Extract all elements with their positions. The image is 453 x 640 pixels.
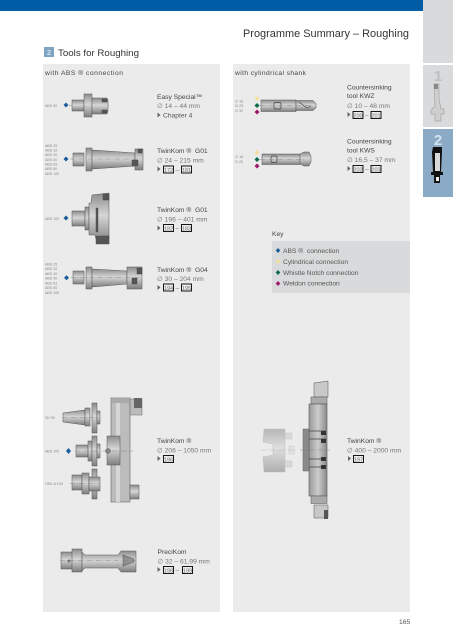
tool: TwinKom G01 small xyxy=(45,144,143,176)
text: TwinKom 206-1050: TwinKom ® xyxy=(157,437,191,445)
tool: TwinKom G04: ABS 63 xyxy=(45,282,57,286)
key item: ABS: ABS ® connection xyxy=(283,247,340,255)
text: TwinKom G01 196-401: TwinKom ® G01 xyxy=(157,206,208,214)
adapter: HSK-A 100 xyxy=(70,469,100,499)
tool: TwinKom G01 small: ABS 32 xyxy=(45,148,57,152)
side tab: chapter 2 xyxy=(423,129,453,197)
text: Easy Special: Chapter 4 xyxy=(163,112,193,120)
tool: Easy Special: ABS 50 xyxy=(45,104,57,108)
tool: TwinKom G01 large xyxy=(45,193,109,244)
text: Countersinking tool KWZ: – xyxy=(365,112,369,119)
key item: Whistle Notch: Whistle Notch connection xyxy=(283,270,359,277)
panel heading: with ABS connection: with ABS ® connection xyxy=(44,69,123,77)
adapter: SK 50 xyxy=(62,403,100,433)
tool: Countersinking KWZ xyxy=(235,96,316,114)
text: PreciKom: 199 xyxy=(183,568,192,574)
text: Countersinking tool KWS: – xyxy=(365,166,369,173)
side tab: chapter 1 xyxy=(423,65,453,127)
tool: TwinKom bar with SK, ABS and HSK adapters: SK 50 xyxy=(45,416,55,420)
panel: cylindrical shank xyxy=(233,64,410,612)
text: PreciKom: 198 xyxy=(164,568,173,574)
text: TwinKom 206-1050 xyxy=(157,437,212,463)
text: PreciKom: – xyxy=(176,567,180,574)
text: Countersinking tool KWZ: ∅ 10 – 48 mm xyxy=(347,103,390,110)
tool: TwinKom G04: ABS 100 xyxy=(45,291,59,295)
side tab: chapter 1: 1 xyxy=(434,68,442,85)
text: TwinKom G01 24-215: TwinKom ® G01 xyxy=(157,147,208,155)
text: TwinKom G04: 195 xyxy=(182,286,191,292)
bar body xyxy=(103,398,142,502)
text: TwinKom G01 196-401: ∅ 196 – 401 mm xyxy=(157,216,208,224)
side tab: blank xyxy=(423,0,453,63)
panel heading: with cylindrical shank: with cylindrical shank xyxy=(234,70,307,77)
tool: TwinKom G01 small: ABS 100 xyxy=(45,172,59,176)
text: TwinKom 400-2000: TwinKom ® xyxy=(347,437,381,445)
tool: TwinKom large bar with adapter xyxy=(261,381,330,519)
tool: TwinKom G04: ABS 40 xyxy=(45,272,57,276)
text: TwinKom G04: ∅ 30 – 204 mm xyxy=(157,276,204,283)
top blue bar xyxy=(0,0,423,11)
text: TwinKom G01 196-401 xyxy=(157,206,208,232)
tool: TwinKom G04: ABS 80 xyxy=(45,286,57,290)
panel: ABS connection xyxy=(43,64,220,612)
text: Countersinking tool KWS xyxy=(347,138,396,173)
text: PreciKom: ∅ 32 – 61,99 mm xyxy=(158,558,210,566)
tool: TwinKom G04: ABS 25 xyxy=(45,262,57,266)
tool: TwinKom G04: ABS 50 xyxy=(45,276,57,280)
text: Countersinking tool KWS: 203 xyxy=(371,167,381,173)
text: Countersinking tool KWZ: tool KWZ xyxy=(347,93,374,100)
text: Countersinking tool KWZ: Countersinking xyxy=(347,84,392,92)
tool: Countersinking KWS: ∅ 20 xyxy=(235,160,243,164)
tool: TwinKom G01 small: ABS 80 xyxy=(45,167,57,171)
tool: Countersinking KWZ: ∅ 25 xyxy=(235,104,243,108)
heading: section number: 2 xyxy=(47,48,51,57)
faded adapter xyxy=(261,429,297,472)
text: TwinKom G01 24-215 xyxy=(157,147,208,174)
text: Easy Special: ∅ 14 – 44 mm xyxy=(157,103,200,110)
text: Countersinking tool KWS: Countersinking xyxy=(347,138,392,146)
tool: Countersinking KWS xyxy=(235,150,311,168)
adapter: ABS 100 xyxy=(75,436,100,466)
tool: TwinKom G01 small: ABS 50 xyxy=(45,158,57,162)
text: TwinKom G01 24-215: – xyxy=(176,167,180,174)
text: TwinKom 206-1050: ∅ 206 – 1050 mm xyxy=(157,448,212,454)
tool: TwinKom G01 small: ABS 25 xyxy=(45,144,57,148)
text: TwinKom 206-1050: 196 xyxy=(164,457,173,463)
tool: Countersinking KWS: ∅ 16 xyxy=(235,155,243,159)
text: TwinKom G04 xyxy=(157,266,208,292)
key item: Cylindrical: Cylindrical connection xyxy=(283,259,348,266)
tool: TwinKom G01 small: ABS 40 xyxy=(45,153,57,157)
tool: TwinKom G01 large: ABS 100 xyxy=(45,217,59,221)
text: TwinKom 400-2000 xyxy=(347,437,402,463)
text: TwinKom G01 24-215: ∅ 24 – 215 mm xyxy=(157,158,204,164)
text: Countersinking tool KWZ: 200 xyxy=(353,113,363,119)
key panel xyxy=(272,241,410,293)
text: TwinKom 400-2000: ∅ 400 – 2000 mm xyxy=(347,448,402,454)
tool: TwinKom G04 xyxy=(45,262,142,295)
side tab: chapter 2: 2 xyxy=(434,132,442,149)
text: TwinKom G01 196-401: 182 xyxy=(164,226,173,232)
bar xyxy=(300,381,330,519)
tool: TwinKom bar with SK, ABS and HSK adapters xyxy=(45,398,142,502)
text: Countersinking tool KWS: ∅ 16,5 – 37 mm xyxy=(347,157,396,164)
text: Countersinking tool KWS: 202 xyxy=(353,167,363,173)
title: Programme Summary – Roughing xyxy=(243,28,409,40)
text: Countersinking tool KWZ: 201 xyxy=(371,113,381,119)
tool: PreciKom xyxy=(60,549,136,572)
tool: Countersinking KWZ: ∅ 32 xyxy=(235,109,243,113)
tool: Countersinking KWZ: ∅ 16 xyxy=(235,100,243,104)
text: PreciKom xyxy=(158,549,210,574)
text: TwinKom G01 196-401: – xyxy=(176,225,180,232)
text: Countersinking tool KWZ xyxy=(347,84,392,119)
text: TwinKom G01 24-215: 172 xyxy=(164,168,173,174)
tool: TwinKom G01 small: ABS 63 xyxy=(45,162,57,166)
heading: Tools for Roughing: Tools for Roughing xyxy=(58,48,139,58)
text: PreciKom: PreciKom xyxy=(158,549,187,556)
heading: section number xyxy=(44,47,54,57)
text: TwinKom G04: – xyxy=(176,285,180,292)
text: TwinKom 400-2000: 197 xyxy=(354,457,363,463)
tool: TwinKom bar with SK, ABS and HSK adapters: HSK-A 100 xyxy=(45,482,63,486)
key item: Weldon: Weldon connection xyxy=(283,280,340,288)
text: TwinKom G04: 194 xyxy=(164,286,173,292)
tool: TwinKom G04: ABS 32 xyxy=(45,267,57,271)
text: TwinKom G01 24-215: 181 xyxy=(182,168,191,174)
tool: TwinKom bar with SK, ABS and HSK adapters: ABS 100 xyxy=(45,450,59,454)
text: Countersinking tool KWS: tool KWS xyxy=(347,148,375,154)
tool: Easy Special xyxy=(45,94,109,117)
key heading: Key xyxy=(272,231,284,238)
text: TwinKom G04: TwinKom ® G04 xyxy=(157,266,208,274)
text: Easy Special: Easy Special™ xyxy=(157,94,202,101)
text: Easy Special xyxy=(157,94,202,120)
page number: 165 xyxy=(399,619,410,626)
text: TwinKom G01 196-401: 183 xyxy=(182,226,191,232)
